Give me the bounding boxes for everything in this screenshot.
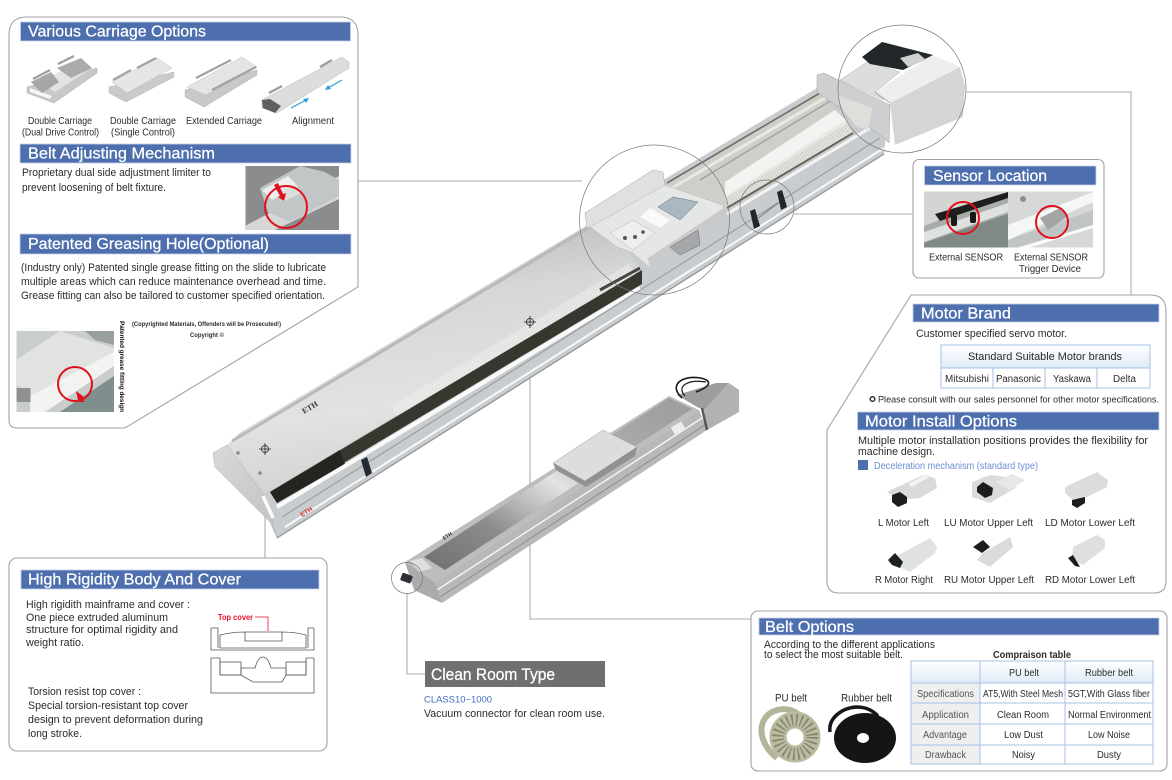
icon: extended carriage — [185, 57, 257, 107]
icon: L motor left — [887, 474, 937, 507]
rigidity text: structure for optimal rigidity and — [26, 624, 178, 636]
diagram: cross section: Top cover — [218, 612, 254, 622]
greasing text: multiple areas which can reduce maintenance overhead and time. — [21, 276, 326, 288]
table: motor brands: Mitsubishi — [945, 374, 989, 385]
motor labels row one: LU Motor Upper Left — [944, 518, 1033, 529]
torsion text: design to prevent deformation during — [28, 714, 203, 726]
belt adjusting text — [22, 167, 211, 194]
table: belt comparison: Drawback — [925, 750, 967, 761]
table: belt comparison: AT5,With Steel Mesh — [983, 689, 1063, 700]
heading: sensor location — [924, 166, 1096, 185]
heading: sensor location: Sensor Location — [933, 168, 1047, 185]
note: Please consult with our sales personnel for other motor specifications. — [878, 394, 1159, 406]
motor labels row two: RU Motor Upper Left — [944, 575, 1034, 586]
panel: belt options — [751, 611, 1167, 771]
icon: double carriage dual drive — [27, 56, 97, 103]
table: belt comparison: Dusty — [1097, 750, 1121, 761]
open channel with belt — [667, 93, 853, 235]
carriage body — [590, 185, 725, 268]
rotated caption: Patented grease fitting design — [118, 321, 125, 412]
icon: R motor right — [888, 538, 937, 572]
heading: motor brand: Motor Brand — [921, 306, 1011, 322]
carriage side — [553, 447, 637, 487]
heading: motor brand — [913, 304, 1159, 322]
toothed belt — [725, 120, 853, 208]
carriage top — [553, 430, 637, 481]
icon: RU motor upper right — [973, 537, 1013, 567]
panel: carriage, belt and greasing — [9, 17, 358, 428]
external sensors — [750, 209, 760, 229]
table: motor brands — [941, 345, 1150, 388]
rail highlights — [277, 288, 640, 507]
heading: belt options — [759, 618, 1159, 636]
torsion text: long stroke. — [28, 728, 82, 740]
top face — [405, 396, 699, 582]
table: belt comparison — [911, 661, 1153, 764]
sensor labels — [929, 252, 1088, 275]
callout circle: sensor — [740, 180, 794, 234]
callout circle: carriage — [580, 145, 730, 295]
heading: various carriage options — [20, 22, 350, 41]
logo on top cover: ETH — [300, 399, 320, 416]
servo motor — [862, 42, 933, 70]
carriage labels: Double Carriage — [28, 116, 92, 127]
table: motor brands: Yaskawa — [1053, 374, 1091, 385]
leader lines — [265, 92, 1131, 674]
heading: patented greasing hole — [20, 234, 351, 254]
carriage labels: (Single Control) — [111, 128, 175, 138]
main linear actuator — [213, 25, 966, 538]
motor labels row one — [878, 518, 1135, 529]
callout circle: connector — [392, 562, 422, 594]
photo: trigger device — [1008, 192, 1093, 248]
motor labels row two — [875, 575, 1135, 586]
carriage plate — [610, 220, 655, 250]
dark slot — [270, 270, 642, 503]
sensor labels: Trigger Device — [1019, 264, 1081, 275]
legend: deceleration mechanism: Deceleration mechanism (standard type) — [874, 461, 1038, 472]
side face — [435, 410, 707, 603]
rigidity text: weight ratio. — [25, 637, 84, 649]
carriage labels: Alignment — [292, 116, 334, 127]
icon: RD motor lower right — [1068, 535, 1105, 567]
icon: double carriage single control — [109, 58, 174, 102]
table: motor brands: Delta — [1113, 374, 1136, 385]
icon: LD motor lower left — [1065, 472, 1108, 508]
motor labels row one: LD Motor Lower Left — [1045, 518, 1135, 529]
heading: high rigidity: High Rigidity Body And Cover — [28, 572, 242, 588]
motor labels row two: RD Motor Lower Left — [1045, 575, 1135, 586]
clean room heading: Clean Room Type — [431, 665, 555, 684]
table: belt comparison: Clean Room — [997, 710, 1049, 721]
clean room text — [424, 694, 605, 720]
belt text — [764, 639, 935, 661]
connector — [400, 573, 413, 584]
heading: belt options: Belt Options — [765, 619, 854, 636]
end flange — [817, 73, 890, 143]
heading: motor install options: Motor Install Options — [865, 414, 1017, 430]
copyright note: (Copyrighted Materials, Offenders will be Prosecuted!) — [132, 321, 281, 328]
carriage white block — [640, 208, 670, 228]
white flat strip — [725, 110, 846, 197]
crosshair: body — [259, 443, 271, 455]
motor install text: Multiple motor installation positions provides the flexibility for — [858, 435, 1148, 447]
motor brand intro: Customer specified servo motor. — [916, 328, 1067, 340]
motor labels row two: R Motor Right — [875, 575, 933, 586]
housing top face — [875, 55, 960, 103]
icon: LU motor upper left — [972, 474, 1025, 503]
drive block — [704, 383, 739, 430]
torsion text — [28, 686, 203, 740]
photo: belt adjusting — [245, 166, 339, 230]
photo: grease fitting — [16, 331, 114, 412]
sensor labels: External SENSOR — [929, 252, 1003, 264]
table title: Compraison table — [993, 649, 1071, 661]
top strip panel — [424, 398, 692, 570]
icon: PU belt — [761, 709, 812, 758]
carriage — [585, 170, 725, 269]
table: belt comparison: Normal Environment — [1068, 710, 1151, 721]
rigidity text: One piece extruded aluminum — [26, 612, 168, 624]
actuator base rail — [213, 88, 889, 538]
belt labels: Rubber belt — [841, 692, 892, 704]
motor mount plate — [840, 62, 900, 100]
diagram: cross section — [211, 612, 314, 693]
table: belt comparison: Advantage — [923, 730, 967, 741]
carriage labels: Extended Carriage — [186, 116, 262, 127]
belt teeth strip — [395, 269, 632, 411]
belt text: According to the different applications — [764, 639, 935, 651]
clean room heading — [425, 661, 605, 687]
icon: alignment — [262, 57, 349, 113]
clean room actuator — [392, 377, 739, 603]
torsion text: Special torsion-resistant top cover — [28, 700, 188, 712]
carriage lower lip — [648, 207, 725, 269]
photo: external sensor — [924, 192, 1008, 248]
table: belt comparison: Specifications — [917, 689, 974, 700]
clean room text: Vacuum connector for clean room use. — [424, 708, 605, 720]
panel: motor — [827, 295, 1166, 593]
torsion text: Torsion resist top cover : — [28, 686, 141, 698]
icon: rubber belt — [830, 707, 896, 763]
mounting block — [837, 95, 872, 130]
table: belt comparison: Low Dust — [1004, 730, 1043, 741]
heading: belt adjusting mechanism — [20, 144, 351, 163]
heading: high rigidity — [21, 570, 319, 589]
callout circle: motor — [838, 25, 966, 153]
sensor labels: External SENSOR — [1014, 252, 1088, 264]
heading: patented greasing hole: Patented Greasing Hole(Optional) — [28, 236, 269, 253]
logo: ETH — [442, 531, 454, 542]
motor install text: machine design. — [858, 446, 935, 458]
heading: belt adjusting mechanism: Belt Adjusting Mechanism — [28, 146, 215, 162]
label sticker — [671, 422, 686, 435]
carriage labels: (Dual Drive Control) — [22, 128, 99, 138]
carriage bracket — [670, 230, 700, 255]
table: motor brands: Panasonic — [996, 374, 1041, 385]
cable — [676, 377, 709, 398]
crosshair: cover — [524, 316, 536, 328]
end face — [405, 562, 442, 603]
clean room text: CLASS10~1000 — [424, 694, 492, 706]
motor install text — [858, 435, 1148, 458]
table: belt comparison: Noisy — [1012, 750, 1035, 761]
table: belt comparison: Low Noise — [1088, 730, 1130, 741]
carriage labels: Double Carriage — [110, 116, 176, 127]
panel: high rigidity body and cover — [9, 558, 327, 751]
table: belt comparison: 5GT,With Glass fiber — [1068, 689, 1151, 700]
copyright note: Copyright © — [190, 331, 224, 339]
end cap — [213, 445, 277, 538]
carriage sensor block — [658, 197, 698, 220]
belt labels — [775, 692, 892, 704]
table: belt comparison: PU belt — [1009, 668, 1039, 679]
greasing text: Grease fitting can also be tailored to customer specified orientation. — [21, 290, 325, 302]
heading: motor install options — [858, 412, 1159, 430]
belt adjusting text: Proprietary dual side adjustment limiter to — [22, 167, 211, 179]
table: belt comparison: Rubber belt — [1085, 668, 1133, 679]
heading: various carriage options: Various Carriage Options — [28, 24, 206, 40]
side sensor left — [361, 457, 372, 477]
greasing text: (Industry only) Patented single grease fitting on the slide to lubricate — [21, 262, 326, 274]
carriage labels — [22, 116, 334, 138]
panel: sensor location — [913, 160, 1104, 278]
belt adjusting text: prevent loosening of belt fixture. — [22, 182, 166, 194]
housing side face — [890, 67, 965, 145]
carriage upper flange — [585, 170, 665, 228]
copyright note — [132, 321, 281, 339]
motor labels row one: L Motor Left — [878, 518, 929, 529]
belt labels: PU belt — [775, 692, 807, 704]
table: motor brands: Standard Suitable Motor brands — [968, 351, 1122, 363]
greasing text — [21, 262, 326, 302]
rigidity text — [25, 599, 190, 649]
rigidity text: High rigidith mainframe and cover : — [26, 599, 190, 611]
table: belt comparison: Application — [922, 710, 969, 721]
actuator top cover — [227, 217, 642, 494]
logo on rail: ETH — [299, 506, 314, 519]
belt text: to select the most suitable belt. — [764, 649, 903, 661]
